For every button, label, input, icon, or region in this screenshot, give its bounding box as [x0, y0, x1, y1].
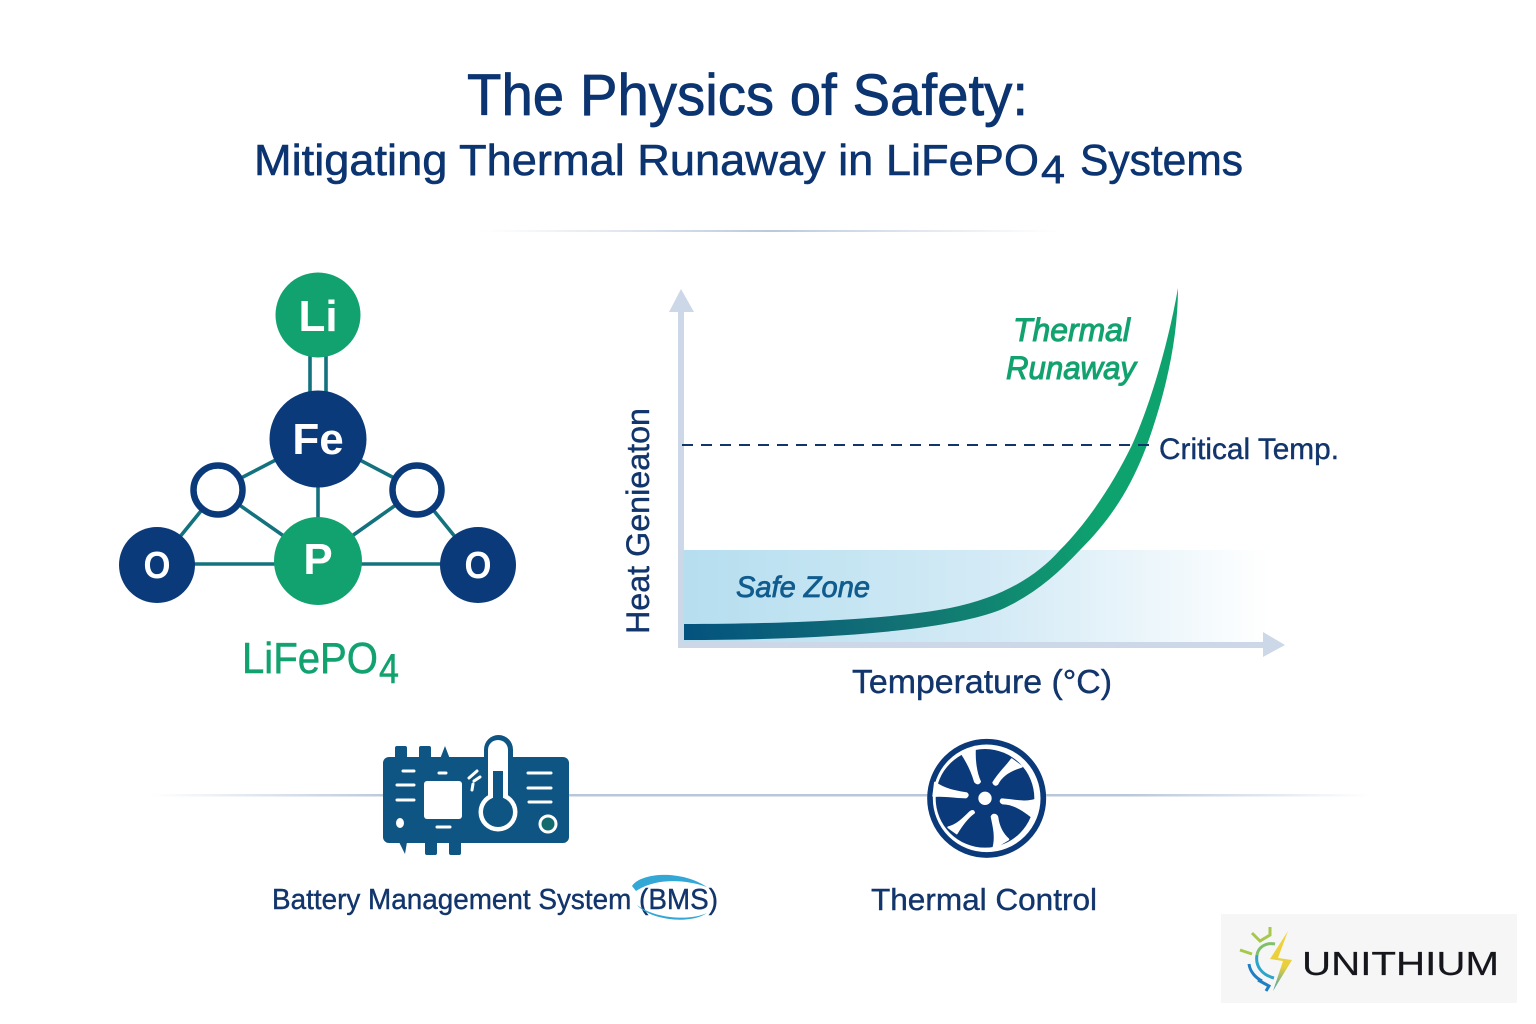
atom: Li: Li: [298, 292, 338, 341]
icon: cooling fan: [930, 742, 1043, 855]
label: Battery Management System (BMS): Battery Management System (BMS): [272, 884, 718, 916]
x axis label: Temperature (°C): [852, 663, 1112, 700]
logo: Unithium: UNITHIUM: [1302, 946, 1499, 983]
formula label: 4: [379, 645, 399, 692]
label: Thermal Runaway: [1006, 312, 1138, 386]
atom: O left: O: [144, 545, 170, 587]
critical temperature line: [682, 444, 1150, 446]
title: 4: [1041, 148, 1065, 192]
atom: O right: O: [464, 545, 492, 587]
label: Thermal Runaway: Runaway: [1006, 350, 1138, 386]
atom: P: [274, 517, 362, 605]
atom: open oxygen right: [392, 466, 442, 514]
logo: Unithium: [1221, 914, 1517, 1003]
safe zone band: [683, 550, 1270, 642]
label: Thermal Control: Thermal Control: [871, 882, 1097, 917]
chart: heat generation vs temperature: [620, 288, 1339, 700]
title: Mitigating Thermal Runaway in LiFePO: [254, 136, 1039, 185]
atom: O right: [440, 527, 516, 603]
formula label: LiFePO: [242, 634, 378, 683]
atom: Fe: [270, 390, 366, 488]
y axis label: Heat Genieaton: [620, 408, 656, 634]
label: critical temp: Critical Temp.: [1159, 433, 1339, 466]
icon: BMS circuit board with thermometer: [383, 735, 569, 855]
atom: Fe: Fe: [292, 415, 344, 464]
atom: open oxygen left: [194, 466, 242, 514]
molecule diagram: LiFePO4 structure: [119, 272, 516, 605]
label: safe zone: Safe Zone: [736, 571, 870, 604]
title: The Physics of Safety:: [467, 63, 1028, 128]
thermal runaway curve: [684, 288, 1178, 640]
icon: swoosh around BMS: [632, 875, 707, 920]
axes: [669, 289, 1285, 657]
label: Thermal Runaway: Thermal: [1013, 312, 1131, 348]
atom: O left: [119, 527, 195, 603]
title: [254, 63, 1243, 192]
atom: P: P: [303, 535, 333, 584]
atom: Li: [276, 272, 360, 358]
title: Systems: [1080, 136, 1243, 185]
